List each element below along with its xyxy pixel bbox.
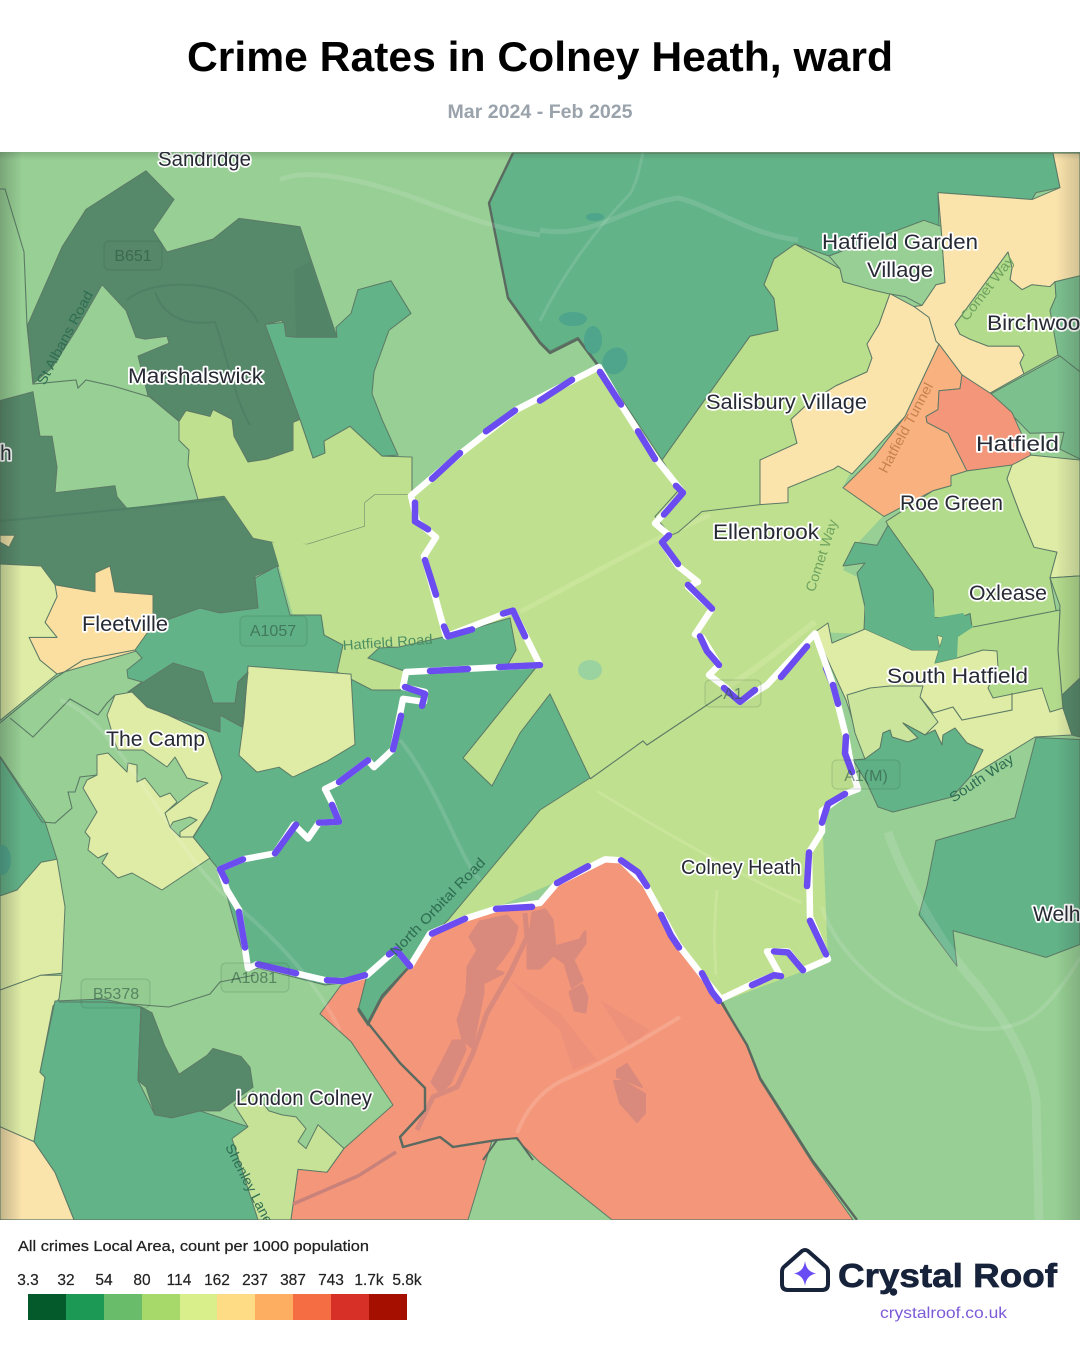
legend scale labels: 80 (133, 1272, 151, 1289)
legend scale labels: 387 (280, 1272, 306, 1289)
lakes and land use on salmon area (293, 910, 680, 1204)
place name labels: Hatfield (976, 433, 1059, 456)
place name labels: Salisbury Village (706, 391, 867, 414)
area: The Camp upper pale (107, 692, 222, 837)
area: mid green near A1(M) (853, 723, 983, 812)
place name labels: h (0, 442, 12, 465)
area: far west pale strip (0, 859, 65, 990)
road name labels: Comet Way (802, 517, 840, 594)
lakes on mid green (0, 213, 633, 875)
road number badges: B651 (114, 248, 152, 265)
area: mid green east of ward, top (489, 153, 1060, 460)
brand name: Crystal Roof (838, 1257, 1058, 1294)
area: east pale (1007, 455, 1080, 578)
heavy dark borders (358, 153, 857, 1220)
icon: Crystal Roof house logo (782, 1250, 828, 1290)
road number badges: A1(M) (844, 768, 888, 785)
place name labels: Fleetville (82, 613, 168, 636)
area: South Hatfield yellow-green patch (847, 686, 938, 759)
faint road network (60, 153, 1080, 1220)
area: dark block at The Camp (128, 663, 248, 732)
area: north-east Marshalswick mid green (265, 281, 411, 458)
legend scale labels (17, 1272, 422, 1289)
place name labels (0, 148, 1080, 1110)
road number badges: B5378 (93, 986, 139, 1003)
road name labels (33, 252, 1017, 1227)
area: Welham mid green (919, 737, 1080, 966)
area: Birchwood (955, 252, 1058, 374)
road number badges: A1081 (231, 970, 277, 987)
area: Marshalswick darker patch (336, 334, 337, 335)
area: Hatfield Tunnel orange (843, 344, 967, 516)
road name labels: North Orbital Road (386, 854, 488, 959)
strip north of ward notch (368, 618, 516, 672)
legend scale labels: 743 (318, 1272, 344, 1289)
ward boundary: white outline with purple dashes (220, 367, 858, 1001)
area: bottom left corner pale orange (0, 1127, 74, 1220)
area: far west mid green (0, 756, 57, 896)
area: Fleetville pale orange (29, 566, 153, 674)
southern choropleth areas (0, 666, 1080, 1220)
area: dark patch by London Colney (138, 1007, 253, 1118)
brand url: crystalroof.co.uk (880, 1305, 1008, 1322)
area: St Albans centre dark green (0, 392, 279, 624)
place name labels: London Colney (236, 1087, 372, 1110)
area: mid green south of Roe Green (842, 525, 972, 629)
area: big salmon area south of ward (291, 859, 853, 1220)
mid green area: southwest ward and A1057 corridor (127, 566, 590, 985)
road number badges: A1057 (250, 623, 296, 640)
area: bottom left mid green (34, 999, 258, 1220)
boundary lines (0, 189, 1063, 1160)
area: Roe Green and Oxlease (886, 464, 1056, 627)
place name labels: Oxlease (969, 582, 1047, 605)
road name labels: Hatfield Road (342, 631, 433, 653)
place name labels: Hatfield Garden (822, 231, 978, 254)
area: The Camp lower pale (83, 753, 210, 890)
legend scale labels: 32 (57, 1272, 75, 1289)
legend scale labels: 54 (95, 1272, 113, 1289)
road name labels: Shenley Lane (222, 1141, 277, 1227)
legend scale labels: 5.8k (392, 1272, 422, 1289)
ward and Ellenbrook yellow-green band (300, 364, 884, 1002)
area: Oxlease south part (957, 610, 1063, 712)
place name labels: Village (867, 259, 933, 282)
area: mid green top-right of ward east overlay (865, 600, 973, 663)
areas traced directly in page coordinates (83, 600, 1080, 890)
road number badges: A1 (723, 686, 743, 703)
place name labels: Roe Green (900, 492, 1003, 515)
legend scale labels: 3.3 (17, 1272, 39, 1289)
place name labels: South Hatfield (887, 665, 1028, 688)
road name labels: South Way (946, 751, 1016, 805)
place name labels: Ellenbrook (713, 521, 820, 544)
choropleth map panel (0, 148, 1080, 1227)
northern choropleth areas (0, 153, 1080, 721)
area: Marshalswick dark green (28, 171, 337, 462)
legend colour bar (28, 1294, 407, 1320)
area: Salisbury Village surroundings (655, 244, 890, 535)
area: Hatfield Garden Village (829, 220, 945, 306)
area: dark strip far east (1062, 678, 1080, 737)
road name labels: Hatfield Tunnel (875, 380, 936, 476)
road name labels: St Albans Road (33, 288, 96, 387)
area: Salisbury Village pale orange (760, 294, 939, 505)
place name labels: The Camp (106, 728, 205, 751)
legend heading: All crimes Local Area, count per 1000 population (18, 1238, 369, 1255)
place name labels: Colney Heath (681, 857, 801, 879)
legend scale labels: 237 (242, 1272, 268, 1289)
title: Crime Rates in Colney Heath, ward (187, 33, 893, 80)
road name labels: Comet Way (957, 252, 1017, 324)
faint roads in ward (520, 515, 815, 975)
legend scale labels: 162 (204, 1272, 230, 1289)
legend scale labels: 1.7k (354, 1272, 384, 1289)
place name labels: Sandridge (158, 148, 251, 171)
area: London Colney (232, 1091, 344, 1220)
area: South Hatfield pale (815, 623, 1072, 777)
subtitle: date range: Mar 2024 - Feb 2025 (448, 102, 633, 123)
area: yellow-green west of ward (north) (179, 410, 412, 545)
area: far west pale (0, 564, 57, 721)
place name labels: Marshalswick (128, 365, 264, 388)
area: yellow-green west of ward (south) (272, 494, 411, 640)
road number badges (81, 241, 900, 1008)
area: Hatfield salmon (926, 375, 1031, 471)
icon: keyring dot under the y (890, 1289, 896, 1295)
legend scale labels: 114 (167, 1272, 192, 1289)
darker streets in dark green areas (0, 285, 258, 521)
sliver mid green (358, 970, 405, 1026)
area: pale polygon north of ward west (239, 666, 355, 777)
area: Hatfield north pale orange (914, 153, 1080, 394)
